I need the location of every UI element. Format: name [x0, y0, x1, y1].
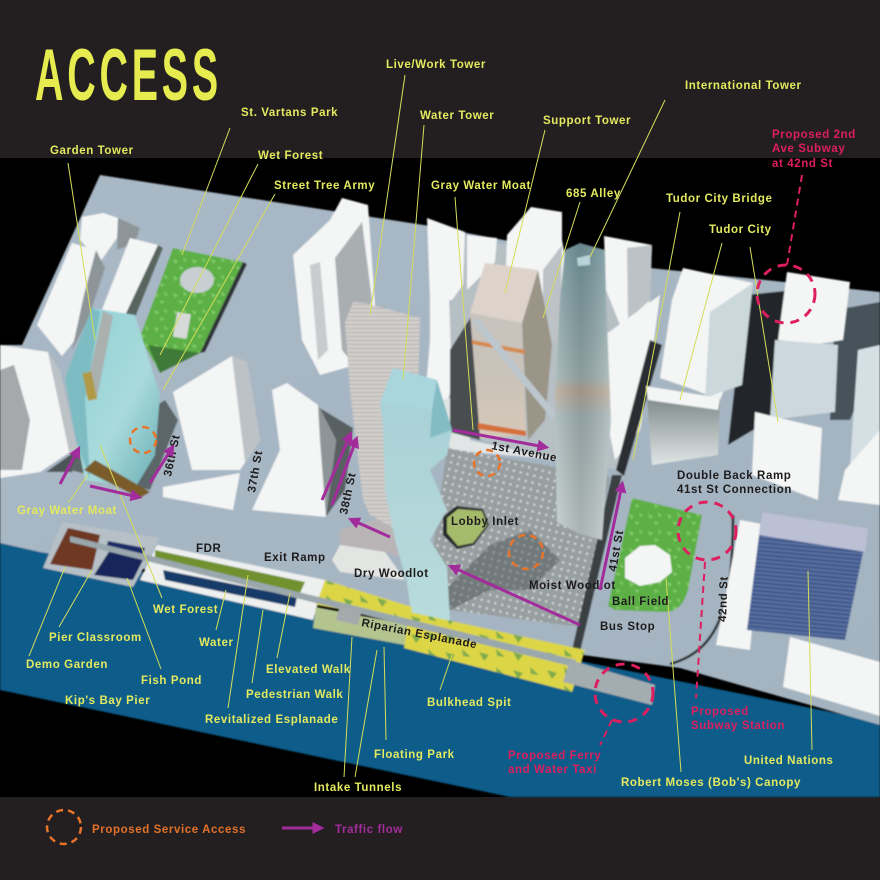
callout: Gray Water Moat lower: Gray Water Moat — [17, 505, 117, 517]
callout: Tudor City Bridge — [633, 193, 772, 460]
callout: Live/Work Tower: Live/Work Tower — [386, 59, 486, 71]
model labels — [162, 434, 731, 651]
plaza right edge road — [572, 475, 622, 652]
callout: Wet Forest upper — [160, 150, 323, 355]
callout: Water: Water — [199, 637, 234, 649]
model labels: 36th St — [162, 434, 183, 478]
callout: Street Tree Army — [163, 180, 375, 390]
garden tower — [65, 308, 160, 498]
walkway junction — [336, 605, 362, 625]
pier walkway — [70, 536, 576, 667]
callout: Proposed Ferry and Water Taxi — [508, 664, 653, 776]
model labels: Lobby Inlet — [451, 516, 519, 528]
callout: Wet Forest lower: Wet Forest — [153, 604, 218, 616]
callout: Double Back Ramp and subway station: 41st St Connection — [677, 484, 792, 496]
callout: Proposed Ferry and Water Taxi: Proposed Ferry — [508, 750, 601, 762]
callout: Pier Classroom — [49, 570, 142, 644]
ball field — [608, 498, 702, 612]
callout: Revitalized Esplanade: Revitalized Esplanade — [205, 714, 338, 726]
callout: Bulkhead Spit — [427, 655, 511, 709]
callout: Robert Moses Canopy — [621, 578, 801, 789]
callout: Pier Classroom: Pier Classroom — [49, 632, 142, 644]
callout: United Nations — [744, 571, 834, 767]
callout: Wet Forest lower — [100, 445, 218, 616]
callout: United Nations: United Nations — [744, 755, 834, 767]
service access circles — [130, 427, 543, 569]
model labels: 41st St — [607, 529, 626, 573]
revitalized esplanade — [140, 545, 325, 620]
site model photograph — [0, 175, 880, 797]
callout: 685 Alley — [543, 188, 621, 318]
ground platform — [0, 175, 880, 725]
plaza under garden tower — [70, 400, 178, 490]
callout: Kip's Bay Pier: Kip's Bay Pier — [65, 695, 150, 707]
callout: Tudor City: Tudor City — [709, 224, 772, 236]
callout: Intake Tunnels: Intake Tunnels — [314, 782, 402, 794]
callout: Double Back Ramp and subway station — [677, 470, 792, 732]
mid blocks 36th-38th — [163, 356, 353, 518]
callout: Fish Pond: Fish Pond — [141, 675, 202, 687]
header band — [0, 0, 880, 158]
title: ACCESS — [35, 35, 222, 116]
callout: Proposed 2nd Ave Subway: at 42nd St — [772, 158, 833, 170]
callout: Proposed 2nd Ave Subway — [757, 129, 856, 323]
callout: Floating Park: Floating Park — [374, 749, 455, 761]
callout: Pedestrian Walk — [246, 610, 343, 701]
model labels: FDR — [196, 543, 222, 555]
callout: Gray Water Moat upper — [431, 180, 531, 430]
callout: Water Tower — [403, 110, 494, 380]
model labels: 38th St — [338, 472, 359, 516]
legend: traffic flow: Traffic flow — [335, 824, 403, 836]
Kip's Bay pier — [43, 522, 160, 587]
international tower — [555, 243, 611, 540]
model labels: Riparian Esplanade — [360, 617, 478, 651]
callout: Proposed Ferry and Water Taxi: and Water Taxi — [508, 764, 597, 776]
callout: St. Vartans Park: St. Vartans Park — [241, 107, 338, 119]
callout: Proposed 2nd Ave Subway: Ave Subway — [772, 143, 845, 155]
callout: Gray Water Moat lower — [17, 475, 117, 517]
callout: Support Tower — [505, 115, 631, 293]
bridge road shadow — [616, 340, 662, 476]
callout: Live/Work Tower — [370, 59, 486, 315]
dotted plaza plate — [430, 448, 610, 627]
callout: Proposed 2nd Ave Subway: Proposed 2nd — [772, 129, 856, 141]
callout: Floating Park — [374, 647, 455, 761]
callout: 685 Alley: 685 Alley — [566, 188, 621, 200]
UN white block — [783, 637, 880, 716]
left dotted plate under towers — [340, 513, 410, 560]
green park — [140, 248, 247, 373]
white block by UN — [716, 520, 762, 650]
callout: Tudor City Bridge: Tudor City Bridge — [666, 193, 772, 205]
bob's canopy — [625, 545, 672, 586]
left city blocks — [0, 213, 163, 478]
callout: Elevated Walk: Elevated Walk — [266, 664, 351, 676]
plaza shadow — [445, 530, 560, 610]
callout: Pedestrian Walk: Pedestrian Walk — [246, 689, 343, 701]
callout: Double Back Ramp and subway station: Double Back Ramp — [677, 470, 791, 482]
callout: Garden Tower — [50, 145, 134, 340]
callout: Revitalized Esplanade — [205, 575, 338, 726]
support tower — [450, 263, 555, 440]
model labels: Exit Ramp — [264, 552, 326, 564]
callout: Support Tower: Support Tower — [543, 115, 631, 127]
live/work tower — [345, 302, 420, 530]
callout: Garden Tower: Garden Tower — [50, 145, 134, 157]
model labels: 42nd St — [717, 576, 731, 622]
centre-back blocks — [425, 207, 660, 470]
callout: Double Back Ramp and subway station: Proposed — [691, 706, 749, 718]
callout: International Tower — [590, 80, 802, 257]
United Nations building — [747, 512, 868, 640]
callout: Demo Garden — [26, 567, 108, 671]
legend: proposed service access — [47, 810, 246, 844]
lobby inlet — [443, 506, 489, 549]
legend: traffic flow — [282, 824, 403, 836]
callout: International Tower: International Tower — [685, 80, 802, 92]
callout: Street Tree Army: Street Tree Army — [274, 180, 375, 192]
legend: proposed service access: Proposed Service Access — [92, 824, 246, 836]
callout: Tudor City — [680, 224, 778, 422]
right city blocks: Tudor City — [646, 268, 880, 505]
callout: Water — [199, 590, 234, 649]
model labels: Dry Woodlot — [354, 568, 429, 580]
callout: Robert Moses Canopy: Robert Moses (Bob's) Canopy — [621, 777, 801, 789]
callout: St. Vartans Park — [182, 107, 338, 255]
callout: Intake Tunnels — [314, 637, 402, 794]
bulkhead spit end — [563, 660, 655, 705]
callout: Water Tower: Water Tower — [420, 110, 494, 122]
traffic arrows — [60, 430, 622, 625]
riparian esplanade strip — [313, 580, 585, 692]
water tower — [380, 368, 452, 627]
callout: Fish Pond — [127, 578, 202, 687]
callout: Gray Water Moat upper: Gray Water Moat — [431, 180, 531, 192]
model labels: 1st Avenue — [490, 440, 558, 465]
fluted white tower — [293, 198, 375, 375]
ramp curve — [670, 515, 733, 664]
callout: Bulkhead Spit: Bulkhead Spit — [427, 697, 511, 709]
callout: Wet Forest upper: Wet Forest — [258, 150, 323, 162]
callout: Double Back Ramp and subway station: Subway Station — [691, 720, 785, 732]
model labels: 37th St — [246, 450, 265, 494]
callout: Elevated Walk — [266, 593, 351, 676]
model labels: Moist Woodlot — [529, 580, 616, 592]
water — [0, 543, 880, 797]
footer band — [0, 797, 880, 880]
model labels: Bus Stop — [600, 621, 655, 633]
model labels: Ball Field — [612, 596, 669, 608]
callout: Demo Garden: Demo Garden — [26, 659, 108, 671]
